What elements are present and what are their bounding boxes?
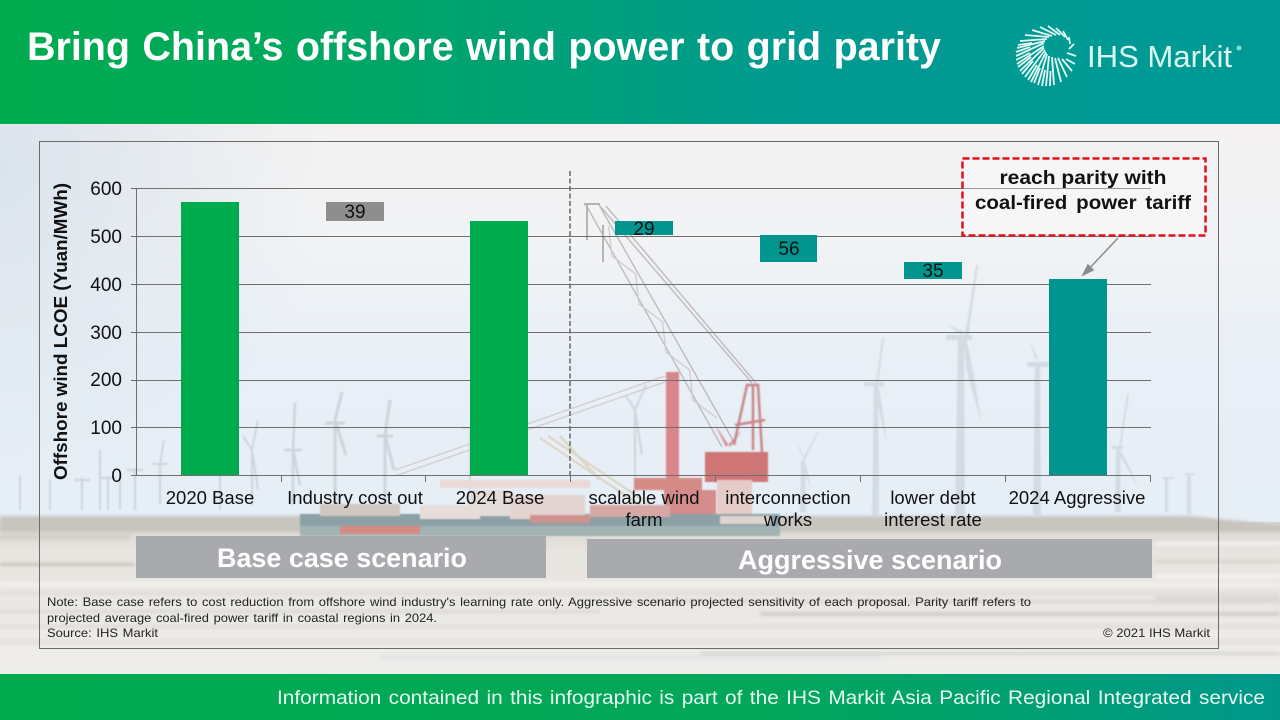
- y axis labels: 200: [90, 370, 122, 391]
- x axis labels: lower debt: [890, 487, 976, 508]
- y axis title: Offshore wind LCOE (Yuan/MWh): [51, 183, 71, 480]
- main crane boom: [584, 203, 756, 447]
- x axis labels: 2020 Base: [166, 487, 254, 508]
- heading: base case scenario: [136, 536, 546, 578]
- heading: aggressive scenario: [587, 539, 1152, 578]
- divider between scenarios: [569, 171, 571, 475]
- title: Bring China’s offshore wind power to grid parity: [27, 25, 942, 69]
- heading: base case scenario: Base case scenario: [217, 543, 467, 573]
- y axis labels: 400: [90, 275, 122, 296]
- note and source: Source: IHS Markit: [47, 626, 159, 640]
- footer band: [0, 674, 1280, 720]
- bar chart: [51, 179, 1151, 530]
- note and source: [47, 595, 1031, 640]
- footer band: Information contained in this infographic is part of the IHS Markit Asia Pacific Regional Integrated service: [277, 687, 1265, 709]
- heading: aggressive scenario: Aggressive scenario: [738, 545, 1002, 575]
- crane frame and red structures: [300, 372, 780, 536]
- y axis labels: 300: [90, 323, 122, 344]
- y axis labels: 500: [90, 227, 122, 248]
- copyright: © 2021 IHS Markit: [1103, 626, 1211, 640]
- callout: reach parity: coal-fired power tariff: [975, 192, 1192, 214]
- y axis labels: [90, 179, 122, 487]
- x axis labels: Industry cost out: [287, 487, 423, 508]
- callout: reach parity: [962, 158, 1206, 236]
- callout: reach parity: reach parity with: [1000, 167, 1166, 189]
- note and source: Note: Base case refers to cost reduction from offshore wind industry's learning rate only. Aggressive scenario projected sensitivity of each proposal. Parity tariff refers to: [47, 595, 1031, 609]
- x axis labels: interconnection: [725, 487, 851, 508]
- bar: Industry cost out: 39: [344, 202, 366, 223]
- x axis labels: farm: [626, 509, 662, 530]
- bar: lower debt interest rate: [904, 261, 962, 282]
- gridlines: [131, 188, 1151, 482]
- y axis labels: 0: [111, 466, 122, 487]
- registered mark: [1236, 46, 1242, 50]
- bar: Industry cost out: [326, 202, 384, 223]
- far left turbines: [20, 385, 646, 510]
- note and source: projected average coal-fired power tariff in coastal regions in 2024.: [47, 611, 437, 625]
- bar: interconnection works: [760, 235, 817, 262]
- bar: interconnection works: 56: [778, 239, 800, 260]
- y axis labels: 100: [90, 418, 122, 439]
- wordmark: IHS Markit: [1087, 39, 1232, 74]
- background photo: offshore wind farm with crane vessel: [0, 124, 1280, 677]
- x axis labels: 2024 Base: [456, 487, 544, 508]
- panel: chart frame: [40, 142, 1218, 648]
- bar: 2024 Aggressive: [1049, 279, 1107, 475]
- second boom and rigging: [395, 376, 665, 505]
- bar: lower debt interest rate: 35: [922, 261, 944, 282]
- icon: sunburst: [1016, 26, 1076, 86]
- bar: scalable wind farm: 29: [633, 219, 655, 240]
- bar: scalable wind farm: [615, 219, 673, 240]
- tall right turbines: [795, 265, 1195, 516]
- bar: 2024 Base: [470, 221, 528, 475]
- bar: 2020 Base: [181, 202, 239, 475]
- x axis labels: [166, 487, 1145, 530]
- x axis labels: interest rate: [884, 509, 982, 530]
- y axis labels: 600: [90, 179, 122, 200]
- header band: [0, 0, 1280, 124]
- x axis labels: 2024 Aggressive: [1009, 487, 1145, 508]
- arrow: callout to 2024 Aggressive bar: [1083, 238, 1118, 275]
- x axis labels: scalable wind: [588, 487, 700, 508]
- x axis labels: works: [763, 509, 812, 530]
- logo: IHS Markit: [1016, 26, 1242, 86]
